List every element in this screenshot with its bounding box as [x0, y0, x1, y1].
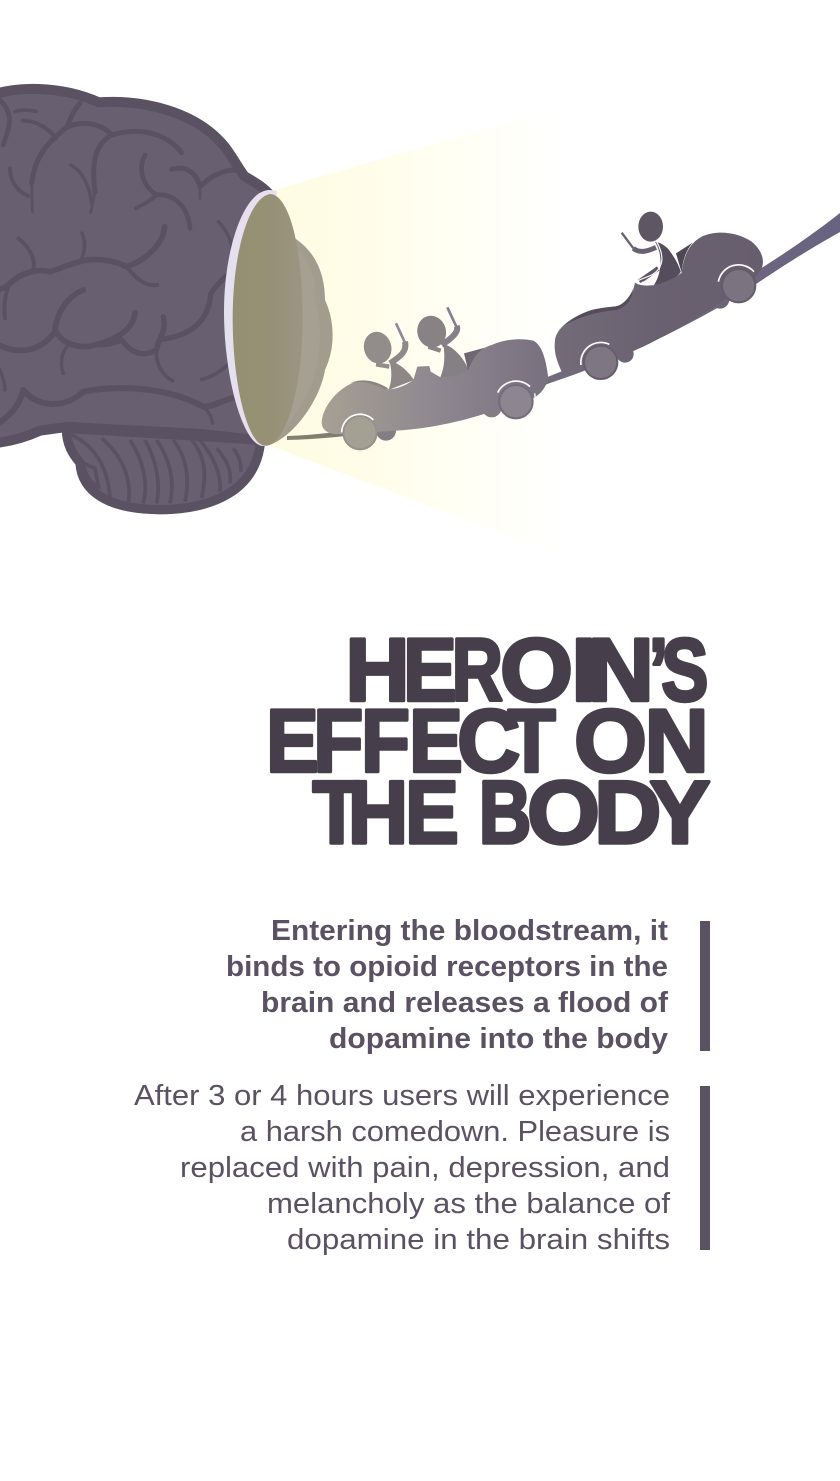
cerebellum: [66, 428, 261, 510]
title: H: [346, 620, 410, 720]
road: [287, 213, 840, 440]
title: D: [594, 762, 661, 862]
car 1 front wheel: [342, 414, 377, 449]
title: B: [479, 762, 531, 862]
regular paragraph bar: [700, 1086, 710, 1250]
tunnel opening with emerging brain: [224, 190, 333, 446]
bold paragraph: [226, 915, 668, 1055]
car 2 back wheel: [718, 265, 755, 302]
car 2 front wheel: [581, 342, 617, 379]
title: S: [661, 620, 708, 720]
title: O: [500, 620, 573, 720]
opening rim: [224, 190, 277, 446]
title: E: [409, 690, 463, 790]
car 1 rear wheels: [376, 397, 502, 441]
title: ’: [649, 620, 668, 720]
car 1 back wheel: [498, 381, 535, 418]
car 1 seat shadow: [464, 348, 485, 372]
title: N: [587, 620, 654, 720]
title: O: [527, 762, 600, 862]
title: T: [312, 762, 361, 862]
title: R: [452, 620, 503, 720]
regular paragraph: After 3 or 4 hours users will experience: [134, 1080, 670, 1112]
title: F: [361, 690, 410, 790]
regular paragraph: [134, 1080, 671, 1256]
car 1 body: [322, 339, 548, 434]
light beam: [268, 106, 562, 556]
lens: [233, 194, 303, 446]
title: E: [405, 762, 459, 862]
bold paragraph bar: [700, 921, 710, 1051]
bold paragraph: binds to opioid receptors in the: [226, 951, 668, 983]
title: E: [266, 690, 319, 790]
car 2 rear wheels: [616, 290, 729, 363]
passenger 1: [360, 323, 414, 390]
title: I: [572, 620, 596, 720]
regular paragraph: dopamine in the brain shifts: [287, 1224, 670, 1256]
car 2 hood shadow: [565, 288, 633, 325]
title: T: [508, 690, 556, 790]
passenger 2: [414, 307, 469, 378]
brain illustration: [0, 89, 270, 510]
bold paragraph: dopamine into the body: [329, 1023, 668, 1055]
car 1 with two passengers: [322, 307, 548, 449]
title: E: [403, 620, 457, 720]
bold paragraph: brain and releases a flood of: [261, 987, 668, 1019]
car 1 hood shadow: [350, 380, 388, 389]
regular paragraph: replaced with pain, depression, and: [180, 1152, 670, 1184]
title: N: [645, 690, 709, 790]
car 2 seat shadow: [676, 243, 693, 273]
car 2 with driver: [555, 212, 763, 379]
car 2 body: [555, 233, 763, 372]
brain folds: [0, 100, 240, 423]
title: F: [313, 690, 363, 790]
glowing brain lobe: [267, 238, 333, 446]
title: C: [457, 690, 520, 790]
driver: [622, 212, 682, 285]
bold paragraph: Entering the bloodstream, it: [271, 915, 668, 947]
title: H: [348, 762, 408, 862]
regular paragraph: a harsh comedown. Pleasure is: [240, 1116, 670, 1148]
cerebrum: [0, 89, 270, 443]
title: Y: [650, 762, 710, 862]
title: [266, 620, 710, 862]
title: O: [574, 690, 647, 790]
regular paragraph: melancholy as the balance of: [267, 1188, 671, 1220]
